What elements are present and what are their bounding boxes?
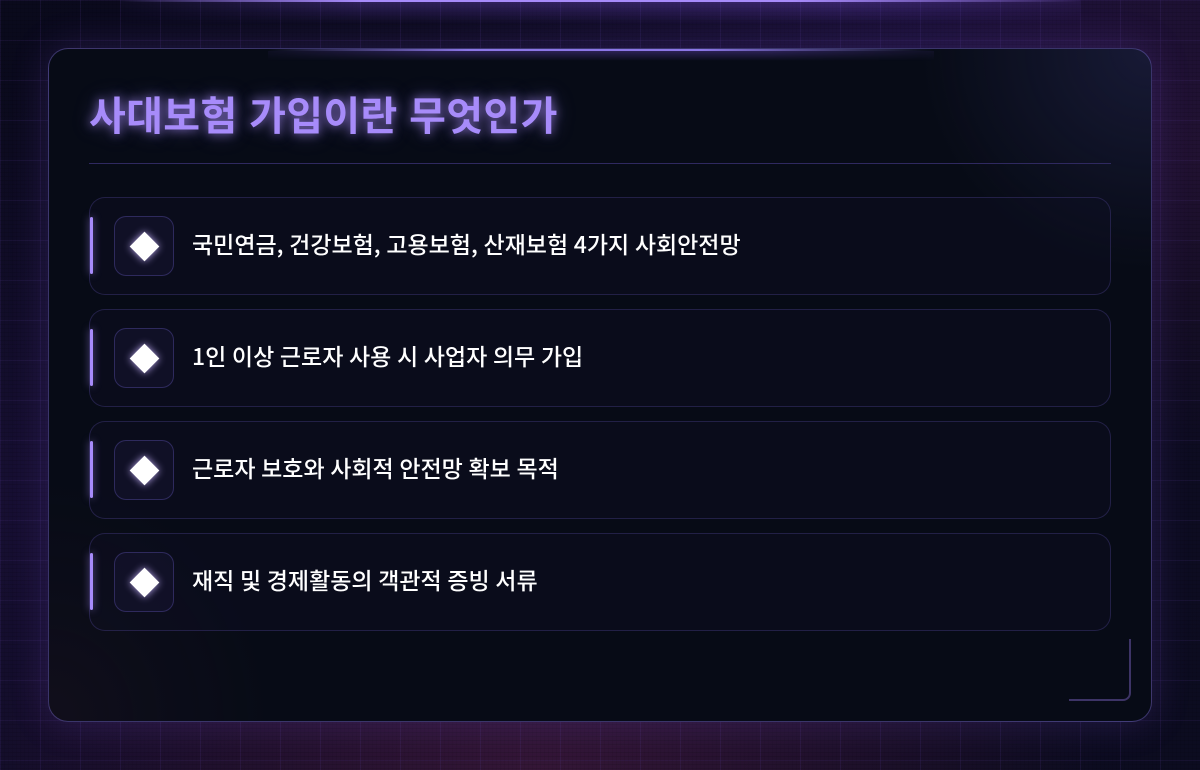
list item 4 (89, 533, 1111, 631)
item text: 1인 이상 근로자 사용 시 사업자 의무 가입 (192, 338, 583, 372)
accent bar (90, 217, 93, 274)
list item 3 (89, 421, 1111, 519)
top glow band (131, 0, 1080, 20)
item text: 국민연금, 건강보험, 고용보험, 산재보험 4가지 사회안전망 (192, 226, 741, 260)
card top glow line (268, 49, 934, 51)
accent bar (90, 441, 93, 498)
item text: 근로자 보호와 사회적 안전망 확보 목적 (192, 450, 559, 484)
title: 사대보험 가입이란 무엇인가 (89, 95, 558, 139)
item text: 재직 및 경제활동의 객관적 증빙 서류 (192, 562, 538, 596)
accent bar (90, 553, 93, 610)
accent bar (90, 329, 93, 386)
list item 2 (89, 309, 1111, 407)
card top glow band (268, 51, 934, 60)
corner bracket (1069, 639, 1131, 701)
icon: diamond (114, 328, 174, 388)
list item 1 (89, 197, 1111, 295)
icon: diamond (114, 552, 174, 612)
icon: diamond (114, 440, 174, 500)
icon: diamond (114, 216, 174, 276)
top glow line (120, 0, 1080, 2)
